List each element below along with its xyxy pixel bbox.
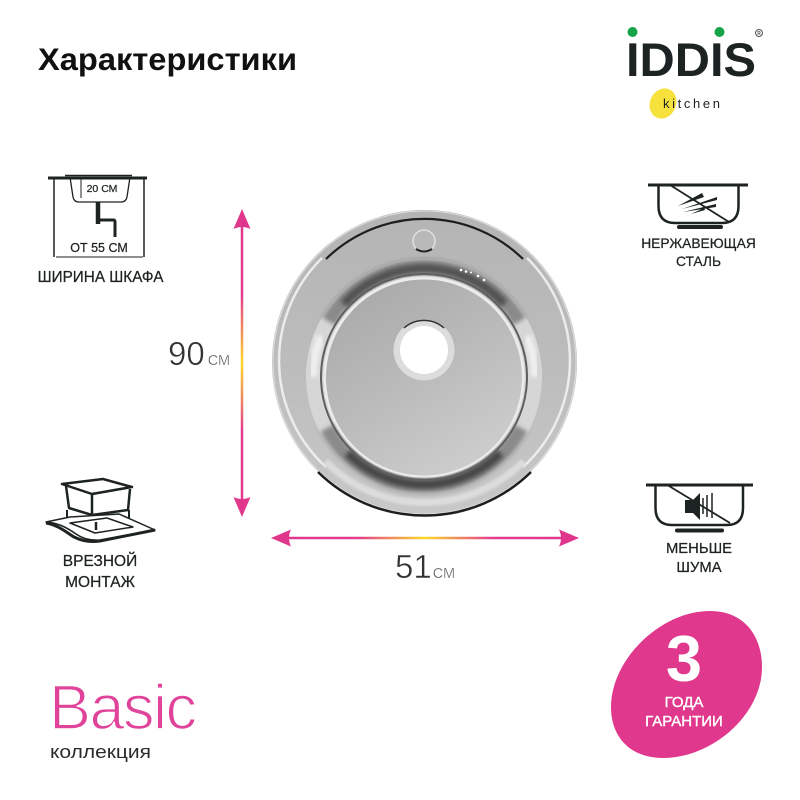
vertical dimension arrow — [234, 209, 250, 517]
warranty badge: ГАРАНТИИ — [645, 713, 723, 730]
sink — [272, 210, 577, 516]
icon: cabinet width — [48, 176, 147, 257]
icon: flush mount — [46, 479, 155, 542]
icon: stainless steel — [648, 185, 748, 227]
title: Характеристики — [38, 41, 297, 77]
label: flush mount: ВРЕЗНОЙ — [63, 552, 137, 570]
height value: 90СМ — [168, 335, 230, 372]
icon: cabinet width: ОТ 55 СМ — [70, 241, 128, 255]
icon: cabinet width: 20 СМ — [87, 183, 117, 195]
label: stainless steel: СТАЛЬ — [676, 254, 721, 269]
label: less noise: МЕНЬШЕ — [666, 541, 732, 557]
icon: less noise — [646, 485, 753, 530]
label: stainless steel: НЕРЖАВЕЮЩАЯ — [641, 236, 756, 251]
label: cabinet width: ШИРИНА ШКАФА — [38, 269, 164, 286]
warranty badge: 3 — [666, 622, 702, 695]
logo: IDDIS kitchen: R — [757, 31, 761, 37]
horizontal dimension arrow — [271, 530, 579, 546]
label: flush mount: МОНТАЖ — [65, 574, 136, 591]
warranty badge — [611, 611, 762, 758]
warranty badge: ГОДА — [665, 694, 703, 711]
width value: 51СМ — [395, 548, 455, 585]
logo: IDDIS kitchen: kitchen — [663, 96, 720, 111]
collection name: Basic — [49, 673, 197, 743]
logo: IDDIS kitchen: IDDIS — [626, 33, 756, 86]
label: less noise: ШУМА — [676, 560, 722, 576]
collection label: коллекция — [50, 742, 151, 762]
logo: IDDIS kitchen — [626, 27, 762, 123]
